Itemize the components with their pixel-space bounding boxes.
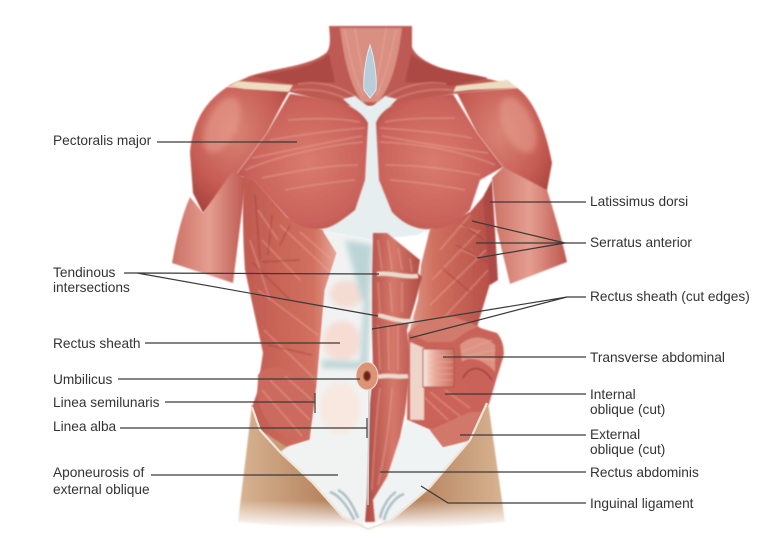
- left arm: [172, 172, 246, 283]
- label: aponeurosis of external oblique: external oblique: [53, 482, 150, 497]
- label: pectoralis major: Pectoralis major: [53, 133, 152, 148]
- cut rectus sheath flap: [408, 316, 478, 342]
- left deltoid: [190, 87, 290, 213]
- label: internal oblique cut: oblique (cut): [590, 402, 665, 417]
- right labels: [590, 194, 750, 511]
- right clavicle band: [453, 80, 517, 92]
- label leader lines: [118, 142, 586, 503]
- deltoid highlights: [196, 91, 544, 159]
- label: serratus anterior: Serratus anterior: [590, 235, 692, 250]
- sheath pink patch lower: [323, 321, 361, 361]
- skin fade at bottom: [230, 500, 515, 538]
- external oblique cut: [430, 412, 484, 447]
- left clavicle band: [229, 81, 293, 92]
- underlay: right lower muscle: [407, 326, 503, 447]
- label: internal oblique cut: Internal: [590, 387, 636, 402]
- left latissimus and oblique: [243, 176, 337, 447]
- label: linea semilunaris: Linea semilunaris: [53, 395, 160, 410]
- left labels: [53, 133, 160, 497]
- label: tendinous intersections: Tendinous: [53, 265, 115, 280]
- rectus abdominis: [365, 233, 422, 522]
- right internal oblique: [410, 340, 473, 420]
- label: rectus sheath: Rectus sheath: [53, 336, 140, 351]
- umbilicus: [356, 362, 378, 390]
- skin: right hip: [372, 402, 505, 534]
- sheath pink patch upper: [330, 280, 364, 308]
- label: inguinal ligament: Inguinal ligament: [590, 496, 694, 511]
- right arm: [492, 167, 567, 284]
- right aponeurosis: [373, 420, 470, 522]
- reflected external oblique flap: [453, 328, 504, 412]
- groin edge outline: [252, 403, 487, 529]
- left pectoralis major: [236, 94, 368, 229]
- label: linea alba: Linea alba: [53, 419, 117, 434]
- right pectoralis major: [376, 94, 503, 229]
- transverse abdominal window: [423, 349, 454, 387]
- tendinous bands: [377, 274, 418, 377]
- skin: left hip: [238, 405, 368, 534]
- neck muscles: [228, 26, 517, 106]
- label: external oblique cut: External: [590, 427, 640, 442]
- left rectus sheath: [280, 231, 372, 527]
- label: aponeurosis of external oblique: Aponeurosis of: [53, 465, 144, 480]
- inguinal folds: [330, 490, 404, 520]
- label: latissimus dorsi: Latissimus dorsi: [590, 194, 688, 209]
- right oblique and serratus: [408, 180, 498, 336]
- right deltoid: [457, 88, 552, 215]
- label: rectus abdominis: Rectus abdominis: [590, 465, 699, 480]
- label: umbilicus: Umbilicus: [53, 372, 112, 387]
- sheath pale patch: [320, 382, 360, 434]
- label: external oblique cut: oblique (cut): [590, 442, 665, 457]
- label: tendinous intersections: intersections: [53, 280, 130, 295]
- linea alba: [368, 380, 369, 505]
- label: rectus sheath cut edges: Rectus sheath (cut edges): [590, 289, 750, 304]
- sheath blue shading: [322, 240, 372, 375]
- anatomical torso illustration: [118, 26, 586, 538]
- left serratus ribs: [250, 195, 330, 439]
- sternum and fascia: [323, 96, 430, 240]
- trachea: [364, 45, 376, 98]
- label: transverse abdominal: Transverse abdominal: [590, 350, 725, 365]
